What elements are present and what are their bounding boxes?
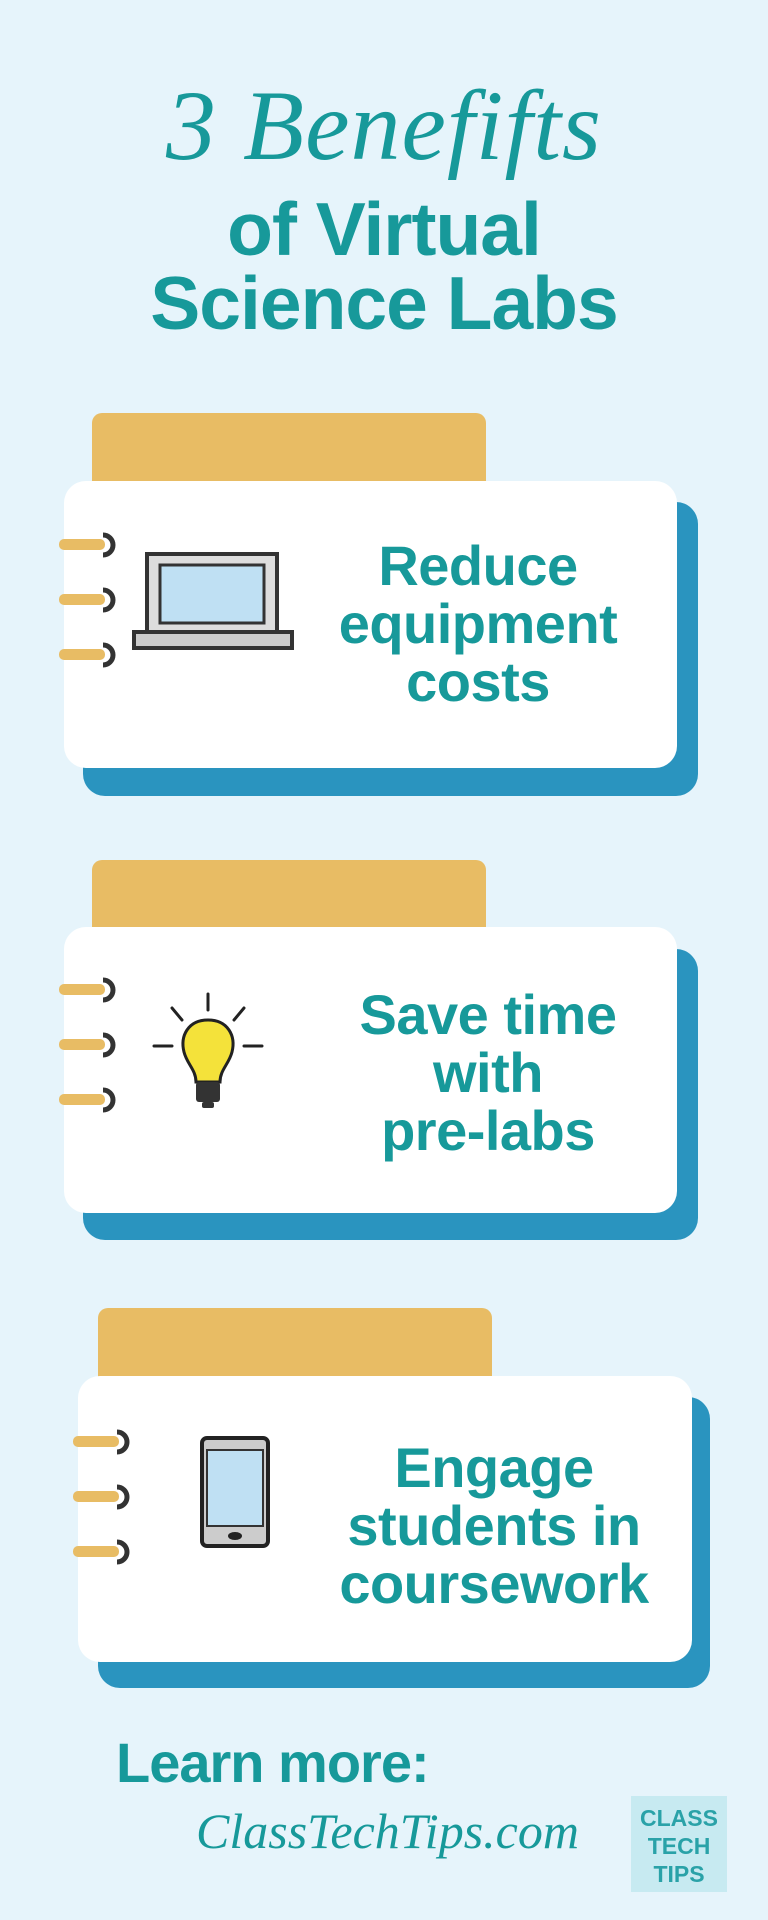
title script line: 3 Benefifts: [166, 70, 602, 181]
text: save time with pre-labs: Save time: [360, 983, 616, 1046]
footer: website: ClassTechTips.com: [196, 1803, 579, 1859]
text: engage students in coursework: students in: [347, 1494, 641, 1557]
title bold lines: [150, 187, 618, 345]
logo: class tech tips: [631, 1796, 727, 1892]
text: reduce equipment costs: costs: [406, 650, 550, 713]
icon: binder rings: [59, 532, 116, 668]
text: reduce equipment costs: equipment: [339, 592, 617, 655]
footer: learn more: Learn more:: [116, 1731, 429, 1794]
icon: binder rings: [59, 978, 116, 1112]
text: engage students in coursework: [339, 1436, 650, 1615]
panel: card 2: [59, 860, 698, 1240]
text: reduce equipment costs: [339, 534, 618, 713]
title: [150, 70, 618, 345]
icon: light bulb: [152, 992, 264, 1108]
text: save time with pre-labs: [360, 983, 616, 1162]
icon: smartphone: [200, 1436, 270, 1548]
text: engage students in coursework: coursework: [339, 1552, 649, 1615]
panel: card 3: [73, 1308, 710, 1688]
panel: card 1: [59, 413, 698, 796]
text: reduce equipment costs: Reduce: [378, 534, 578, 597]
icon: binder rings: [73, 1430, 130, 1564]
logo: class tech tips: TECH: [648, 1833, 710, 1859]
text: save time with pre-labs: pre-labs: [381, 1099, 595, 1162]
title bold lines: of Virtual: [227, 187, 541, 271]
logo: class tech tips: CLASS: [640, 1805, 718, 1831]
logo: class tech tips: TIPS: [653, 1861, 705, 1887]
text: engage students in coursework: Engage: [394, 1436, 594, 1499]
icon: laptop: [132, 552, 294, 650]
text: save time with pre-labs: with: [433, 1041, 543, 1104]
title bold lines: Science Labs: [150, 261, 618, 345]
